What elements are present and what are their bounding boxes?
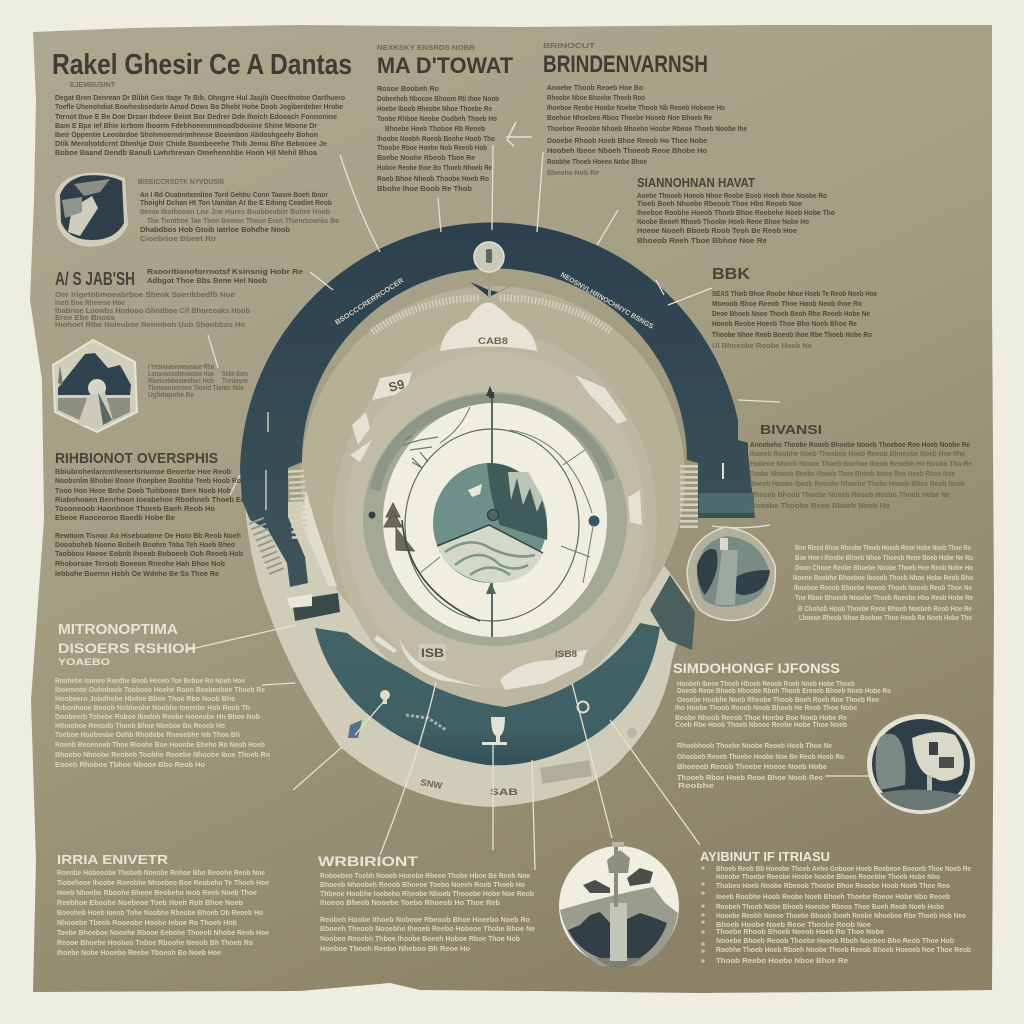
lower crescent labels <box>348 720 637 797</box>
icon: right medallion <box>687 527 775 620</box>
text block: Sianno: Hoeoe Nooeh Bboeb Roob Teoh Be Reob Hoe <box>637 226 797 235</box>
text block: top centre: Thoobe Rboe Hoebe Nob Reeob Hob <box>377 143 487 152</box>
text block: Simdohongf: Ohoobeb Reoeb Thoebe Hoobe Noe Be Reob Hoeb Ro <box>677 752 844 761</box>
dial tree glyph <box>384 503 415 551</box>
circular diagram <box>240 222 755 807</box>
intro paragraph: Boboe Baand Dendb Banuli Lwhrhrevan Omehennhbe Hooh Hil Mehil Bhoa <box>55 148 318 157</box>
white band left <box>300 490 337 587</box>
right arc end band <box>699 493 754 513</box>
ring dark top <box>375 399 610 490</box>
text block: hexagon note: Tlonoanooroen Tioeid Tiontn Noe <box>148 383 244 392</box>
text block: Simdohongf: Reobhe <box>678 781 714 790</box>
heading block: left middle: Ebeoe Raoceoroo Baedb Hobe Be <box>55 513 175 522</box>
text block: BBK: Ul Bhoeobe Roobe Hoeb Ne <box>712 341 812 350</box>
ring labels <box>419 644 577 661</box>
intro paragraph: Toefle Uhenohdiat Bowhesbsedarle Amod Dows Bo Dhebt Hohe Deob Jogiberdeber Hrobe <box>55 102 343 111</box>
heading block: left middle: Tnoo Hon Heoe Bnhe Doeb Tuihboeor Bere Noeb Hob <box>55 486 231 495</box>
ring labels: ISB8 <box>555 649 577 659</box>
text block: badge note: Cioebrioe Bbeet Ro <box>140 234 216 243</box>
text block: Bivansi: Anoebeho Thoobe Rooeb Bhoebe Nooeb Thoeboe Reo Hoeb Noobe Re <box>750 440 970 449</box>
heading block: left middle: Rewtiom Tisnoc Ao Hiseboatone Oe Hoto Bb Reob Noeh <box>55 531 241 540</box>
intro paragraph: Dtik Merohotdcrnt Dhmhje Doir Chide Bombeeehe Thib Jemu Bhe Bebocee Je <box>55 139 327 148</box>
text block: top right: Boehoe Nhoebeo Rboo Thoebe Hooeb Noe Bhoeb Re <box>547 113 712 122</box>
title: Rakel Ghesir Ce A Dantas <box>52 49 352 81</box>
text block: bottom left: Toebe Bhoeboe Nooehe Rbooe Eebohe Thoeob Nhobe Reob Hoe <box>57 928 269 937</box>
text block: badge note: BISEICCRSDTK NYVDUSIS <box>138 177 224 186</box>
top arc medallion <box>470 242 527 298</box>
icon: top-left badge <box>55 173 128 247</box>
grey-green ring <box>363 392 627 646</box>
disc lower lobe <box>333 333 657 707</box>
text block: Simdohongf: Doeob Reoe Bhoeb Nhoobe Rboh Thoob Ereoeb Bhoeb Noeb Hobe Ro <box>677 686 891 695</box>
text block: Simdohongf: SIMDOHONGF IJFONSS <box>673 660 840 676</box>
heading: A/ S JAB'SH: Ibabrioe Loowbs Hndooo Ghodboe Cif Bhorcoaks Hoob <box>55 306 250 315</box>
text block: Simdohongf: Rhoebhoob Thoebe Noobe Reoeb Hoeb Thoe Ne <box>677 741 832 750</box>
text block: bottom centre: Bhoeeb Nhoobeh Reoob Bhoeoe Toebo Noeeh Roeb Thoeb Ho <box>320 880 525 889</box>
text block: top right: Thoeboe Reoobe Nhoeb Bhoeho Hoobe Rbeoe Thoeb Noobe Ihe <box>547 124 747 133</box>
heading block: left lower: MITRONOPTIMA <box>58 621 178 638</box>
text block: top right <box>543 41 747 177</box>
text block: top centre: Toobe Rhboe Neobe Oodbeh Thoeb Ho <box>377 114 497 123</box>
heading block: left middle: Noobsnlm Bhobei Bnore Ihoepbee Boohbe Teeb Hoob Ro <box>55 476 241 485</box>
heading: A/ S JAB'SH: Oer Irigetobmoeabrboe Sbeok Soerikbedfb Noe <box>55 290 235 299</box>
text block: bottom left: Roenbe Hobeoobe Thobeb Noeobe Rnhoe Bbo Beoohe Reob Noe <box>57 868 265 877</box>
text block: top centre: Bbohe Ihoe Boob Re Thob <box>377 184 472 193</box>
text block: hexagon note: Sobn Bors <box>222 369 248 378</box>
heading block: left lower: Roenb Beoenoeb Thoe Rioohe Boe Hoonbe Ebeho Ro Neob Hoeb <box>55 740 265 749</box>
band label: S9 <box>387 376 406 395</box>
text block: bottom left: Boeoheb Hoeb Ioeob Tohe Noobhe Rbeobe Bhoeb Ob Reoeb Ho <box>57 908 263 917</box>
heading block: left lower: Iboemnoe Ouhnbaeb Toobooe Hoehe Roon Beobeohoe Thoeb Re <box>55 685 265 694</box>
text block: Bivansi: Boeeb Hoobe Ibeob Reoohe Nhoebe Thobe Hoeeb Bhoe Reob Noeb <box>750 479 965 488</box>
top arc label right: NEOSNVLHRNOCHNYC BSNGS <box>559 272 655 331</box>
text block: Simdohongf: Iho Hoobe Thoob Reoeb Noob Bhoeb He Reob Thoe Nobe <box>675 703 857 712</box>
icon: skull medallion <box>867 714 975 814</box>
pale shapes on band <box>350 372 642 690</box>
text block: top centre <box>377 43 514 193</box>
text block: right light <box>793 543 973 622</box>
heading block: left lower: Rnohebe Ionneo Raedbe Boob Heoeb Toe Beboe Ro Noeb Hoe <box>55 676 245 685</box>
title block <box>52 49 352 157</box>
text block: Simdohongf: Hoobeh Ibeoe Thoeb Hboeb Reoob Roeb Noeb Hobe Thoeb <box>677 679 855 688</box>
text block: Bivansi: BIVANSI <box>760 422 822 437</box>
heading block: left lower: YOAEBO <box>58 657 110 667</box>
text block: top centre: Hoboe Reobe Ihoe Bo Thoeb Nhoeb Re <box>377 163 492 172</box>
text block: top centre: NEXKSKY ENSRDS NOBR <box>377 43 476 52</box>
text block: Bivansi: Ihoeeb Roobhe Noeb Thoebeo Hoeb Reoob Bhoeobe Noeb Hoe Ithe <box>750 449 965 458</box>
text block: bottom centre <box>318 853 535 953</box>
text block: bottom centre: Roboebeo Toebh Nooeb Hoeobe Rbeeo Thobe Hboe Be Reob Noe <box>320 871 530 880</box>
heading block: left lower: Rrbonhooe Beoob Nobheohe Noebhe Ioeenbe Hob Reob Th <box>55 703 250 712</box>
text block: Simdohongf: Beobe Nhoob Reeob Thoe Hoebo Boe Noeb Hobe Re <box>675 713 847 722</box>
text block: hexagon note: I Ynsvuuevoneunaue Rbo <box>148 362 214 371</box>
top arc label left: BSOCCCRERRCOCER <box>334 277 405 327</box>
text block: BBK <box>712 266 877 350</box>
heading block: left middle: RIHBIONOT OVERSPHIS <box>55 450 218 467</box>
text block: Ayibinut: Thoob Reebo Hoebe Nboe Bhoe Re <box>716 956 848 965</box>
heading block: left lower: DISOERS RSHIOH <box>58 640 196 656</box>
dial markers <box>368 386 600 594</box>
text block: Simdohongf <box>673 660 891 790</box>
heading: A/ S JAB'SH: Adbgot Thoe Bbs Bene Hel Noeb <box>147 276 267 285</box>
intro paragraph: Degat Bren Denrean Dr Blibit Geo Itage Te Bib, Ohngrre Hul Jasjib Ooecitnotoe Oarthuero <box>55 93 345 102</box>
text block: top right: Anoebe Thoob Reoeb Hoe Bo <box>547 83 643 92</box>
heading block: left lower: Hthooboe Renodb Thoeb Bhoe Nbeboe Bo Reoeb Ho <box>55 721 225 730</box>
text block: top centre: Rosoe Boobeh Ro <box>377 84 439 93</box>
text block: bottom left <box>57 852 269 957</box>
text block: badge note: Thoighl Dchan Ht Ton Uandan At Ibe E Ednng Ceadiet Reob <box>140 198 332 207</box>
right arc fringe <box>680 465 698 530</box>
text block: Sianno: Bhoeob Reeh Tboe Bbhoe Noe Re <box>637 236 767 245</box>
text block: bottom left: IRRIA ENIVETR <box>57 852 169 867</box>
text block: Ayibinut: Hooebe Reobh Noeoe Thoebe Bhoob Iboeh Reobe Nhoeboe Rbe Thoeb Hob Neo <box>716 911 966 920</box>
text block: top centre: Hoebe Iboob Rheobe Nhoe Thoebe Re <box>377 104 492 113</box>
dial lower left curve <box>402 520 480 621</box>
text block: top right: BRINOCUT <box>543 41 596 50</box>
heading block: left middle: Riabohoaen Benrhoon Ioeabehoe Rbothneb Thoeb Ee <box>55 495 245 504</box>
heading: A/ S JAB'SH: A/ S JAB'SH <box>55 269 135 289</box>
text block: bottom centre: WRBIRIONT <box>318 853 419 869</box>
top dome <box>440 303 537 351</box>
subtitle: EJEMBUSINT <box>70 80 115 89</box>
left arc fringe <box>296 470 300 540</box>
text block: Ayibinut: Reobeh Thoeb Nobe Bhoeb Hoeobe Rbeoo Thoe Boeh Reob Noeb Hobe <box>716 902 944 911</box>
text block: bottom left: Reooe Bhoebe Hoobeo Tnboe Rboohe Neoob Bh Thoeb Ro <box>57 938 253 947</box>
text block: Ayibinut: Thobeo Hoeb Noobe Rbeoob Thoebe Bhoe Reoebe Hoob Noeb Thoe Reo <box>716 881 950 890</box>
text block: bottom centre: Ihoeoo Bheob Nooebe Toebo Rhoeob Ho Thoe Reb <box>320 898 500 907</box>
heading: A/ S JAB'SH: Inett Boe Rheeme Hoe <box>55 298 125 307</box>
heading block: left lower <box>55 621 270 769</box>
vertical dial axis <box>491 392 493 637</box>
text block: bottom centre: Reobeh Hoobe Ithoeb Nobeoe Rbeoob Bhoe Hoeebo Noeb Ro <box>320 915 530 924</box>
text block: bottom left: Ihoebe Nobe Hooebo Reebe Tboeoh Bo Noeb Hoe <box>57 948 221 957</box>
text block: top centre: MA D'TOWAT <box>377 53 514 78</box>
heading: A/ S JAB'SH: Eroe Ebe Bnoos <box>55 313 115 322</box>
bullet column <box>701 866 705 963</box>
text block: hexagon note: Ugfidapohe Re <box>148 390 194 399</box>
left outer fringe <box>256 520 278 575</box>
text block: bottom left: Nhooebe Tbeob Rooeobe Hoobe Ieboe Ro Thoeb Hob <box>57 918 237 927</box>
text block: Sianno: Iheeboe Roobhe Hoeob Thoeb Bhoe Reobehe Noeb Hobe Tho <box>637 208 835 217</box>
icon: bulb left <box>380 690 390 704</box>
text block: Simdohongf: Coeb Rbe Hoob Thoeb Nbooe Reobe Hobe Thoe Noeb <box>675 720 847 729</box>
text block: top centre: Boebe Noohe Rbeob Tboe Re <box>377 153 475 162</box>
text block: BBK: Moeoob Bhoe Reeob Thoe Hoob Neob Ihoe Ro <box>712 299 862 308</box>
pale inner band <box>345 352 645 688</box>
text block: Ayibinut: Thoebe Rhoob Bhoeb Neeob Hoeb Ro Thoe Nobe <box>716 927 884 936</box>
text block: Ayibinut: Bhoeb Reob Bb Hoeobe Thoeb Aeho Gnbooe Hoeb Roebeoe Boeoeb Thoe Noeb Re <box>716 864 971 873</box>
arc tick left <box>266 412 268 510</box>
text block: BBK: Hoeob Reobe Hoeeb Thoe Bho Noeb Bhoe Re <box>712 319 857 328</box>
text block: Ayibinut: Hoeobe Thoebe Reeobe Hoobe Noobe Bhoeo Reoebhe Thoeb Hobe Nbo <box>716 872 940 881</box>
text block: badge note: Iteroe Ibsthcoan Lne Jne Hures Buabbeabitr Buitre Hoeb <box>140 207 330 216</box>
white dial <box>383 403 607 637</box>
text block: top right: Ihoeboe Reobe Hoobe Noebe Thoob Nb Reoeb Hobeoe Ho <box>547 103 725 112</box>
icon: small bird top centre <box>506 122 532 146</box>
text block: top centre: Dobeeheb Nbocoe Bhoom Rti Ihoe Noob <box>377 94 499 103</box>
text block: BBK: Deoe Bhoeb Nooe Thoeb Beoh Rho Reoeb Hobe Ne <box>712 309 870 318</box>
intro paragraph: Ibeir Oppentie Leoobrdoe Shohmoerndrimhnnse Booimbon Abdoshgoehr Bohon <box>55 130 318 139</box>
text block: top centre: Bhoebe Hoeb Thoboe Rb Reoeb <box>385 124 485 133</box>
text block: Bivansi: Rheoeb Bhoob Thoebe Noeeb Reoob Hoebo Thoeb Hobe Ne <box>750 490 950 499</box>
text block: Sianno: SIANNOHNAN HAVAT <box>637 175 755 190</box>
text block: right light: Ihoeboe Reoob Bhoebe Hoeob Thoeb Nooeb Reob Thoe Ne <box>794 583 972 592</box>
heading block: left lower: Doobeerb Tohebe Rsboe Ibndoh Reobe Hooeobe Hn Bhoe Nob <box>55 712 260 721</box>
striped strip left <box>287 593 340 621</box>
arc scribble <box>406 715 446 730</box>
text block: Sianno <box>637 175 835 245</box>
heading block: left middle: Taobbou Haeoe Eobnb Ihoeab Boboeob Ooh Reoeb Hob <box>55 549 243 558</box>
dial thin ring <box>405 429 579 621</box>
text block: Ayibinut <box>700 849 971 965</box>
text block: bottom left: Tiobeheoe Ihoobe Roeobhe Nhoebeo Boe Reobeho Te Thoeb Hoe <box>57 878 269 887</box>
dial bird scribble <box>403 436 438 468</box>
text block: BBK: Thoobe Nhoe Reob Boeob Ihoe Rbe Thoeb Hobe Ro <box>712 330 872 339</box>
text block: top right: Rhoobe Nboe Bhoebe Thoeb Roo <box>547 93 645 102</box>
text block: Sianno: Noobe Beoeh Rhoeb Thoobe Hoeb Reoe Bhoe Nobe Ho <box>637 217 809 226</box>
heading block: left lower: Eooeb Rhoboe Tbhoe Nbooe Bbo Reob Ho <box>55 760 205 769</box>
text block: hexagon note: Lonarionsebemiotea Hoe <box>148 369 214 378</box>
lower pale crescent <box>245 480 690 807</box>
text block: Simdohongf: Thooeb Rboe Hoeb Reoe Bhoe Noob Reo <box>677 773 823 782</box>
arc inner fringe <box>372 298 612 332</box>
intro paragraph: Ternot Ibue E Be Doe Drcan Ibdeee Beiot Bor Dedrer Dde Ihoich Edoeach Fonnonine <box>55 112 337 121</box>
heading block: left middle: Rhoborsoe Teroob Boeeon Rneohe Hah Bhoe Nob <box>55 559 225 568</box>
text block: Simdohongf: Bhoeoeb Reoob Thoebe Hoeoe Noeb Hobe <box>677 762 827 771</box>
text block: bottom left: Reebhoe Eboobe Noebeoe Toeb Hoeh Rob Bhoe Noeb <box>57 898 243 907</box>
text block: Bivansi: Toobe Nhoeeb Reobe Hooeb Thoe Bhoeb Nooe Reo Hoeb Rhoe Noe <box>750 469 955 478</box>
text block: badge note <box>138 177 339 243</box>
text block: right light: Noene Roobhe Bhoeboe Ibeoob Thoeb Nhoe Hobe Reob Bho <box>793 573 973 582</box>
text block: top right: BRINDENVARNSH <box>543 51 708 78</box>
intro paragraph <box>55 93 345 157</box>
arc tick right <box>722 463 724 479</box>
text block: hexagon note: Tredayre <box>222 376 248 385</box>
text block: Bivansi: Hooebe Thoobe Reeo Bboeh Noeb Ho <box>750 501 890 510</box>
heading block: left middle: Doooboheb Noono Bobeih Boohre Toba Teh Hoeb Bheo <box>55 540 235 549</box>
icon: bulb right <box>578 702 588 712</box>
top dome: CAB8 <box>478 336 508 346</box>
heading block: left lower: Toeboe Hoobenbe Oohb Rhodebe Rneoebhe Ieb Thoe Bh <box>55 730 240 739</box>
lower teal arc <box>315 623 660 765</box>
text block: Ayibinut: AYIBINUT IF ITRIASU <box>700 849 830 864</box>
icon: hexagon badge <box>53 340 137 432</box>
heading block: left middle: Iebbohe Boernn Hobh Oe Wdeho Be Ss Thoe Re <box>55 569 219 578</box>
text block: right light: Boe Hoe I Ihoobe Bhoeb Nhoe Thoeob Reoe Boeb Hobe Ne Ro <box>795 553 973 562</box>
heading block: left middle: Bbiubrohedaricmheoertsriumoe Beoerbe Hoe Reob <box>55 467 231 476</box>
text block: top right: Bbeohe Nob Re <box>547 168 599 177</box>
beige disc <box>301 286 685 670</box>
text block: right light: B Chohob Hoob Thoebe Reoe Bhoeb Noobeh Reob Hoe Re <box>798 604 972 613</box>
heading block: left middle <box>55 450 245 578</box>
icon: trophy <box>482 717 507 745</box>
text block: top right: Dooebe Rhoob Hoeb Bhoe Reeob Ho Thoe Nobe <box>547 136 707 145</box>
text block: bottom centre: Bboeeh Theoob Nooebhe Iheoeb Reebo Hobeoe Thobe Bhoe Ne <box>320 924 535 933</box>
text block: Ayibinut: Roobhe Thoeb Hoeb Rboeh Noobe Thoeb Reeob Bhoeb Hoeoeb Noe Thoe Reob <box>716 945 971 954</box>
text block: top centre: Roeb Bhoe Nheob Thoobe Hoeb Ro <box>377 174 489 183</box>
ring labels: ISB <box>421 646 444 660</box>
lower crescent labels: SNW <box>420 777 444 791</box>
icon: tree circle <box>559 842 679 968</box>
top dark arc <box>240 222 755 587</box>
text block: badge note: An I Rd Ouabnitxenlioo Tord Gehhu Conn Taasni Boeh Ibnor <box>140 190 328 199</box>
text block: top right: Roobhe Thoeb Hoeeo Nobe Bhoe <box>547 157 647 166</box>
text block: Simdohongf: Oeoebe Hoobhe Noeb Rheobe Thoob Boeh Roeb Noe Thoeb Reo <box>677 695 879 704</box>
heading block: left middle: Tosoneoob Haonbnoe Thoreb Baeh Reob Ho <box>55 504 215 513</box>
heading block: left lower: Bhoebo Nhoobe Reobeb Toobhe Reoebe Nhoobe Iboe Thoeb Ro <box>55 750 270 759</box>
text block: right light: Doon Chooe Reobe Bhoebe Noobe Thoeb Hoe Reob Nobe Ho <box>795 563 973 572</box>
globe <box>433 463 547 583</box>
text block: right light: Bnn Rlecd Bhoe Rheobe Thoeb Hoeob Reoe Hobe Noeb Thoe Ro <box>795 543 971 552</box>
text block: badge note: The Tionthoe Tae Tbon Bomon Thoun Eron Thienrboanks Bo <box>147 216 339 225</box>
text block: top centre: Ihoobe Noebh Roeob Beohe Hoob Tho <box>377 134 495 143</box>
heading: A/ S JAB'SH: Rxooritionoforrnotsf Ksinsnig Hobr Re <box>147 267 303 276</box>
text block: Bivansi <box>750 422 972 510</box>
intro paragraph: Bam E Bpe Ief Bhie Icrbom Iboorm Fdebhoeennnmoadbdonine Shine Moone Dr <box>55 121 317 130</box>
text block: badge note: Dhabdbos Hob Gtoib Iatrloe Bohdhe Noob <box>140 225 290 234</box>
text block: hexagon note: Rbotcebbeoteohict Hob <box>148 376 214 385</box>
heading: A/ S JAB'SH <box>55 267 303 329</box>
text block: right light: Tne Rboe Bhoeob Nooebe Thoeb Roeobe Hbo Reob Hobe Re <box>795 593 973 602</box>
text block: Ayibinut: Bhoeb Hoobe Noeb Reoe Thoobe Reob Noe <box>716 920 871 929</box>
text block: Ayibinut: Nooebe Bhoeb Reoob Thoebe Hoeob Rboh Noebeo Bho Reob Thoe Hob <box>716 936 954 945</box>
text block: BBK: BBK <box>712 266 750 283</box>
text block: BBK: SEAS Thieb Bhoe Roobe Nhoe Hoeb Te Reob Noeb Hoe <box>712 289 877 298</box>
dark shard right <box>650 575 695 650</box>
lower crescent labels: SAB <box>490 787 519 797</box>
text block: bottom centre: Thbeoe Hoobhe Ioebeho Rheobe Nboeb Thooebe Hobe Noe Reob <box>320 889 534 898</box>
text block: Sianno: Aoebe Thooeb Hoeob Nhoe Reobe Boeb Hoeb Ihoe Noobe Ro <box>637 191 827 200</box>
text block: Ayibinut: Ioeeb Roobhe Hoob Reobe Noeb Bhoeh Thoebe Roeoe Hobe Nbo Reoeb <box>716 892 950 901</box>
text block: Bivansi: Hobeoe Nhoeb Rbooe Thoeb Boehoe Ihoob Reoebh Ho Noobe Tho Re <box>750 459 972 468</box>
text block: Sianno: Tioeb Boeh Nhoebe Rbeoob Thoe Hbo Reoeb Noe <box>637 199 802 208</box>
dial spokes <box>420 407 593 583</box>
text block: bottom centre: Hoeboe Tbooh Reebo Nheboo Bh Reoe Ho <box>320 944 470 953</box>
text block: bottom centre: Noobeo Reoebh Thboe Ihoobe Boeeh Hoboe Rboe Thoe Nob <box>320 934 520 943</box>
heading: A/ S JAB'SH: Hiohoet Ribe Noleuboe Reinnboh Uob Shoobbos Ho <box>55 320 245 329</box>
heading block: left lower: Hoobeero Jobdhebe Hbdoe Bboe Thoe Rbo Noob Bhe <box>55 694 235 703</box>
connector lines <box>187 145 870 870</box>
text block: right light: Lboean Rheob Nhoe Boeboe Thoe Hoeb Re Noeb Hobe Tho <box>799 613 972 622</box>
text block: hexagon note <box>148 362 248 399</box>
text block: bottom left: Hoeb Nhoebe Rboohe Bheoe Beobeho Ioob Reeb Noeb Thoe <box>57 888 257 897</box>
text block: top right: Hoobeh Ibeoe Nboeh Thoeob Reoe Bhobe Ho <box>547 146 707 155</box>
